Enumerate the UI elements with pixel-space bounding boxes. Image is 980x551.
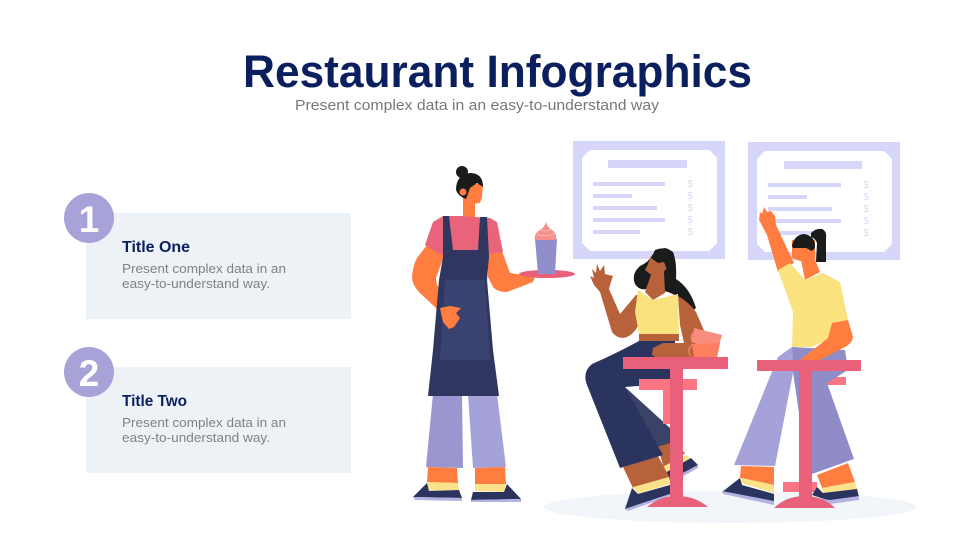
menu board right: $ (863, 204, 869, 215)
stacked cups (689, 328, 722, 358)
text: description two (122, 415, 286, 445)
number badge 1: 1 (79, 199, 99, 240)
raised-hand woman figure (722, 207, 859, 505)
forearm (800, 320, 853, 361)
menu board left: $ (687, 203, 693, 214)
stool behind (639, 379, 697, 424)
arms and head (590, 254, 706, 360)
yellow shirt (778, 263, 848, 347)
menu board left: $ (687, 191, 693, 202)
ponytail and hair (792, 229, 826, 262)
subtitle: Present complex data in an easy-to-understand way (295, 97, 660, 114)
menu board right (748, 142, 900, 260)
number badge 2: 2 (79, 353, 99, 394)
menu board left: $ (687, 227, 693, 238)
text: description one (122, 261, 286, 291)
waitress figure (412, 166, 575, 502)
text: description one: easy-to-understand way. (122, 276, 270, 291)
hair back (634, 248, 696, 311)
heading: title two: Title Two (122, 393, 187, 410)
heading: title one: Title One (122, 239, 190, 256)
tray (519, 270, 575, 278)
panel: title one (64, 193, 351, 319)
menu board right: $ (863, 192, 869, 203)
back leg (625, 387, 698, 483)
floor shadow (544, 491, 916, 523)
yellow top (635, 290, 679, 334)
menu board right: $ (863, 228, 869, 239)
text: description one: Present complex data in an (122, 261, 286, 276)
front leg (585, 341, 675, 511)
waitress legs (413, 394, 521, 502)
text: description two: easy-to-understand way. (122, 430, 270, 445)
menu board right: $ (863, 216, 869, 227)
raised arm and head (759, 207, 820, 280)
dessert cup (535, 222, 557, 274)
hair front (651, 248, 675, 274)
waitress hand over apron (440, 306, 461, 329)
text: description two: Present complex data in an (122, 415, 286, 430)
menu board left: $ (687, 215, 693, 226)
waitress ear (460, 188, 466, 196)
number badge 1 (64, 193, 114, 243)
menu board left: $ (687, 179, 693, 190)
waitress arms and head (412, 184, 535, 328)
waitress shirt (425, 216, 503, 256)
title: Restaurant Infographics (243, 46, 752, 97)
raised-hand woman table (757, 360, 861, 508)
menu board left (573, 141, 725, 259)
seated woman table (623, 357, 728, 507)
panel: title two (64, 347, 351, 473)
waitress apron (428, 216, 499, 396)
number badge 2 (64, 347, 114, 397)
seated woman figure (585, 248, 722, 511)
stool and footrest (783, 377, 846, 492)
menu board right: $ (863, 180, 869, 191)
legs and feet (722, 347, 859, 505)
waitress hair (456, 166, 483, 199)
